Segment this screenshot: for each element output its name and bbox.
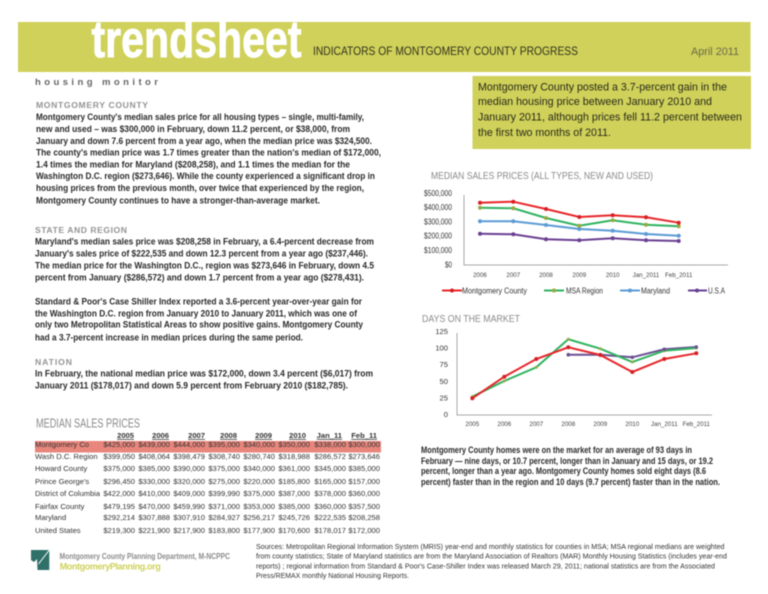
row: Howard County [35,464,380,473]
y axis labels: 75 [440,360,448,369]
row: District of Columbia: $378,000 [314,489,346,498]
x axis labels: Feb_2011 [683,421,711,428]
sources note [256,542,727,580]
line chart: days on the market [435,327,712,428]
chart heading: median sales prices: MEDIAN SALES PRICES (ALL TYPES, NEW AND USED) [431,170,653,182]
row: Montgomery Co: $338,000 [314,440,346,449]
row: District of Columbia [35,489,380,498]
row: Prince George's: Prince George's [35,477,89,486]
text block: Montgomery County: housing prices from the previous month, over twice that experienced by the region, [36,183,364,194]
row: Montgomery Co: $425,000 [103,440,135,449]
row: Maryland: $245,726 [278,513,310,522]
row: Maryland: $222,535 [314,513,346,522]
row: Wash D.C. Region: $273,646 [348,452,380,461]
legend [442,286,726,296]
row: Montgomery Co [35,440,380,449]
callout: the first two months of 2011. [478,127,611,139]
text block: Nation: January 2011 ($178,017) and down 5.9 percent from February 2010 ($182,785). [35,380,348,392]
x axis labels: 2009 [593,421,608,428]
x axis labels: 2007 [506,272,521,279]
logo: planning department [31,550,230,572]
x axis labels [465,421,711,428]
row: Fairfax County: $479,195 [103,502,135,511]
row: United States: $217,900 [173,526,205,535]
row: Prince George's: $220,000 [243,477,275,486]
callout: Montgomery County posted a 3.7-percent gain in the [478,82,727,94]
text block: Nation [35,357,373,392]
text block: Montgomery County: The county's median price was 1.7 times greater than the nation's median of $172,000, [36,148,381,158]
table header row [117,431,378,440]
row: Wash D.C. Region: $318,988 [278,452,310,461]
row: Montgomery Co: $350,000 [278,440,310,449]
y axis labels: $300,000 [424,217,453,226]
table header row: 2010 [289,431,306,440]
x axis labels: 2006 [473,272,487,279]
table: median sales prices [35,431,381,535]
table header row: 2007 [188,431,205,440]
table header row: 2006 [152,431,169,440]
callout [472,76,751,149]
table header row: 2008 [220,431,237,440]
row: Fairfax County: $385,000 [278,502,310,511]
row: United States: $183,800 [208,526,240,535]
x axis labels: 2008 [561,421,576,428]
text block: State and Region: STATE AND REGION [35,225,127,235]
x axis labels [473,272,693,279]
table header row: 2009 [255,431,272,440]
table heading: MEDIAN SALES PRICES [36,416,140,430]
row: Wash D.C. Region: $308,740 [208,452,240,461]
row: Prince George's: $275,000 [208,477,240,486]
row: Fairfax County: Fairfax County [35,502,85,511]
series: nation [568,347,696,357]
text block: Montgomery County [36,100,381,206]
text block: State and Region: The median price for the Washington D.C., region was $273,646 in February, down 4.5 [35,260,375,272]
text block: Nation: In February, the national median price was $172,000, down 3.4 percent ($6,017) from [35,368,373,380]
x axis labels: 2010 [606,272,620,279]
row: Howard County: $361,000 [278,464,310,473]
text block: days on market summary [421,445,720,488]
x axis labels: 2006 [497,421,512,428]
markers [478,200,681,243]
table header row: Jan_11 [317,431,343,440]
table header row: 2005 [117,431,135,440]
row: Fairfax County: $470,000 [138,502,170,511]
row: District of Columbia: $399,990 [208,489,240,498]
y axis labels: 25 [440,393,448,402]
title: trendsheet [92,11,302,69]
x axis labels: 2009 [572,272,587,279]
row: United States: $170,600 [278,526,310,535]
table header row: Feb_11 [351,431,378,440]
series: county [472,347,696,398]
header band [18,11,750,72]
row: Maryland: $284,927 [208,513,240,522]
row: Wash D.C. Region [35,452,380,461]
logo: planning department: Montgomery County Planning Department, M-NCPPC [60,552,230,561]
text block: Nation: NATION [35,357,72,367]
row: Prince George's: $320,000 [173,477,205,486]
y axis labels: 50 [440,377,448,386]
legend: Maryland [641,286,670,296]
icon: department mark [31,550,49,570]
row: Prince George's: $330,000 [138,477,170,486]
y axis labels: $500,000 [424,189,453,198]
text block: Montgomery County: Montgomery County continues to have a stronger-than-average market. [36,196,320,206]
row: Fairfax County: $360,000 [314,502,346,511]
sources note: Sources: Metropolitan Regional Information System (MRIS) year-end and monthly statistics for counties in MSA; MSA regional medians are weighted [256,542,724,551]
text block: Montgomery County: Montgomery County's median sales price for all housing types – single, multi-family, [36,112,364,123]
row: Maryland: $307,888 [138,513,170,522]
row: Wash D.C. Region: $399,050 [103,452,135,461]
row: Fairfax County: $371,000 [208,502,240,511]
row: Maryland: Maryland [35,513,66,522]
text block: Montgomery County: Washington D.C. region ($273,646). While the county experienced a significant drop in [36,171,375,182]
row: District of Columbia: $360,000 [348,489,380,498]
x axis labels: Feb_2011 [665,272,693,279]
row: Maryland: $307,910 [173,513,205,522]
row: Maryland [35,513,380,522]
row: United States: $177,900 [243,526,275,535]
row: Prince George's: $165,000 [314,477,346,486]
row: Prince George's [35,477,380,486]
y axis labels: 0 [444,410,448,419]
row: Howard County: $390,000 [173,464,205,473]
row: Prince George's: $296,450 [103,477,135,486]
text block: State and Region: January's sales price of $222,535 and down 12.3 percent from a year ago ($237,446). [35,248,368,260]
x axis labels: 2008 [539,272,553,279]
row: District of Columbia: $409,000 [173,489,205,498]
legend: U.S.A [708,286,726,296]
series: U.S.A [480,234,679,241]
row: District of Columbia: District of Columbia [35,489,101,498]
subtitle: INDICATORS OF MONTGOMERY COUNTY PROGRESS [313,46,578,58]
row: Howard County: Howard County [35,464,88,473]
series: Maryland [480,221,679,236]
series: Montgomery County [480,202,679,223]
text block: State and Region: had a 3.7-percent increase in median prices during the same period. [35,332,303,344]
sources note: reports) ; regional information from Standard & Poor's Case-Shiller Index was released March 29, 2011; national statistics are from the Associated [256,562,715,570]
row: Howard County: $375,000 [103,464,135,473]
row: Howard County: $340,000 [243,464,275,473]
sources note: Press/REMAX monthly National Housing Reports. [256,571,409,580]
row: Montgomery Co: $439,000 [138,440,170,449]
row: Montgomery Co: $444,000 [173,440,205,449]
chart heading: days on the market: DAYS ON THE MARKET [422,313,520,325]
row: Fairfax County: $459,990 [173,502,205,511]
text block: days on market summary: Montgomery County homes were on the market for an average of 93 days in [421,445,692,456]
line chart: median sales prices [424,189,728,296]
row: Montgomery Co: $300,000 [348,440,380,449]
row: United States: $219,300 [103,526,135,535]
row: United States: $178,017 [314,526,346,535]
row: Montgomery Co: $340,000 [243,440,275,449]
x axis labels: Jan_2011 [651,421,678,428]
text block: State and Region: Standard & Poor's Case Shiller Index reported a 3.6-percent year-over-year gain for [35,296,362,308]
y axis labels [435,327,448,419]
row: Maryland: $292,214 [103,513,135,522]
text block: Montgomery County: January and down 7.6 percent from a year ago, when the median price was $324,500. [36,136,372,147]
row: District of Columbia: $375,000 [243,489,275,498]
row: Montgomery Co: $395,000 [208,440,240,449]
row: Wash D.C. Region: $398,479 [173,452,205,461]
row: Howard County: $385,000 [138,464,170,473]
callout: January 2011, although prices fell 11.2 percent between [478,112,742,124]
row: United States: $221,900 [138,526,170,535]
row: Fairfax County [35,502,380,511]
row: Wash D.C. Region: $280,740 [243,452,275,461]
row: Wash D.C. Region: Wash D.C. Region [35,452,98,461]
row: Fairfax County: $353,000 [243,502,275,511]
row: Prince George's: $157,000 [348,477,380,486]
y axis labels: 100 [435,344,448,353]
row: Prince George's: $185,800 [278,477,310,486]
row: United States: $172,000 [348,526,380,535]
row: District of Columbia: $387,000 [278,489,310,498]
text block: Montgomery County: 1.4 times the median for Maryland ($208,258), and 1.1 times the median for the [36,160,350,170]
text block: State and Region: the Washington D.C. region from January 2010 to January 2011, which was one of [35,308,358,320]
section label: housing monitor: housing monitor [35,77,158,88]
y axis labels: $0 [445,260,453,270]
row: United States [35,526,380,535]
y axis labels: $400,000 [424,203,453,212]
row: Wash D.C. Region: $408,064 [138,452,170,461]
callout: median housing price between January 2010 and [478,96,712,108]
y axis labels: 125 [435,327,448,336]
logo: planning department: MontgomeryPlanning.org [60,562,161,572]
text block: State and Region: Maryland's median sales price was $208,258 in February, a 6.4-percent decrease from [35,236,374,248]
legend: MSA Region [566,286,603,296]
row: District of Columbia: $422,000 [103,489,135,498]
series: MSA Region [480,208,679,226]
row: Maryland: $256,217 [243,513,275,522]
y axis labels [424,189,453,270]
row: Maryland: $208,258 [348,513,380,522]
text block: Montgomery County: MONTGOMERY COUNTY [36,100,148,110]
text block: State and Region [35,225,375,344]
y axis labels: $200,000 [424,232,453,241]
row: Fairfax County: $357,500 [348,502,380,511]
sources note: from county statistics; State of Maryland statistics are from the Maryland Association of Realtors (MAR) Monthly Housing Statistics (includes year-end [256,552,727,560]
row: Wash D.C. Region: $286,572 [314,452,346,461]
row: District of Columbia: $410,000 [138,489,170,498]
markers [470,338,698,400]
x axis labels: 2007 [529,421,544,428]
series: region [472,339,696,397]
legend: Montgomery County [462,286,527,296]
date: April 2011 [691,46,739,58]
row: Montgomery Co: Montgomery Co [35,440,89,449]
text block: State and Region: percent from January ($286,572) and down 1.7 percent from a year ago ($278,431). [35,272,364,284]
x axis labels: 2005 [465,421,480,428]
row: United States: United States [35,526,81,535]
text block: State and Region: only two Metropolitan Statistical Areas to show positive gains. Montgomery County [35,320,364,330]
x axis labels: 2010 [625,421,640,428]
y axis labels: $100,000 [424,246,453,255]
row: Howard County: $345,000 [314,464,346,473]
row: Howard County: $375,000 [208,464,240,473]
x axis labels: Jan_2011 [633,272,660,279]
text block: Montgomery County: new and used – was $300,000 in February, down 11.2 percent, or $38,000, from [36,124,350,135]
row: Howard County: $385,000 [348,464,380,473]
